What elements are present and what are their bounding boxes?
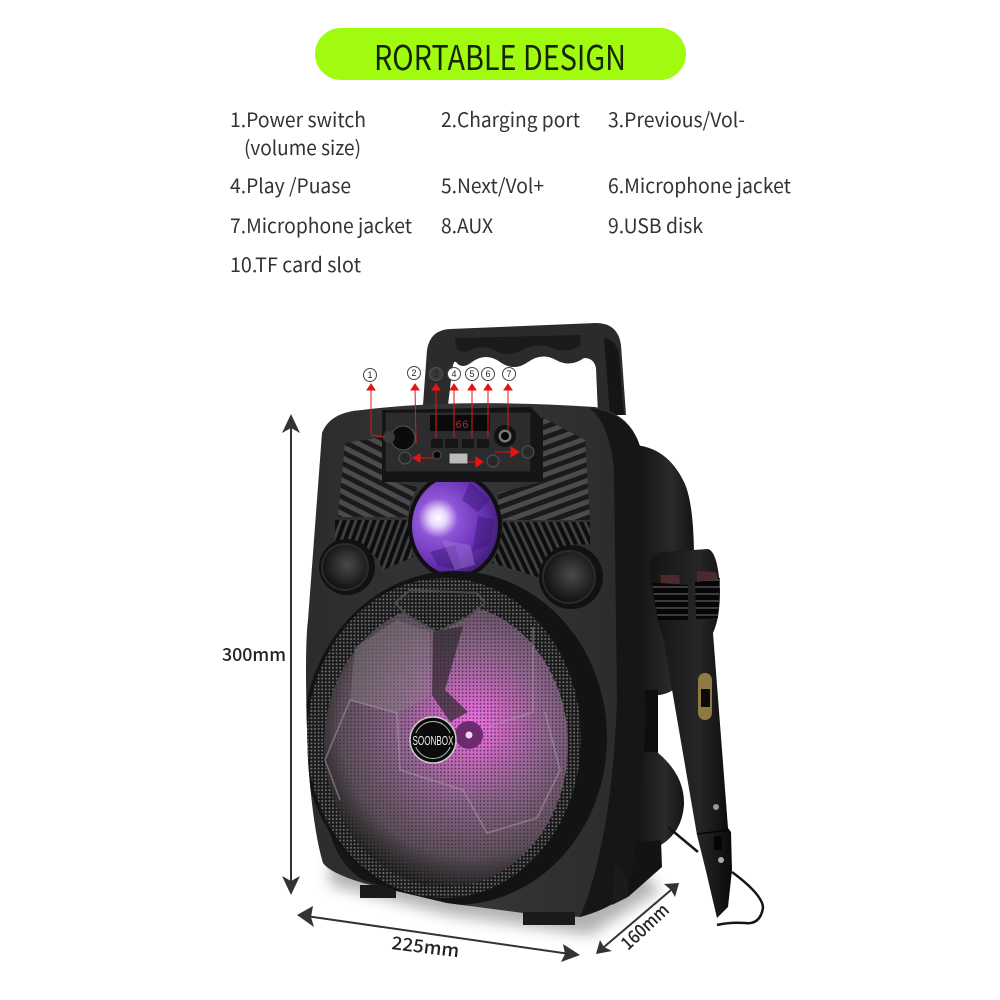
display: 66 bbox=[455, 420, 469, 432]
list of controls: 8.AUX bbox=[441, 210, 494, 239]
woofer bbox=[303, 571, 607, 905]
upper left vent bbox=[338, 437, 418, 517]
top hex panel bbox=[395, 590, 485, 632]
title pill: RORTABLE DESIGN bbox=[374, 31, 626, 80]
list of controls: 6.Microphone jacket bbox=[608, 170, 791, 199]
microphone bbox=[650, 549, 732, 918]
lower left vent bbox=[335, 520, 413, 570]
height dimension arrow bbox=[222, 414, 300, 895]
microphone cable bbox=[668, 827, 763, 925]
inner glow ball bbox=[455, 721, 483, 749]
mic head grilles bbox=[652, 578, 720, 620]
list of controls: 10.TF card slot bbox=[230, 249, 361, 278]
soonbox badge bbox=[410, 717, 456, 763]
callout numbers: 10 bbox=[524, 450, 532, 457]
callout numbers: 4 bbox=[451, 369, 457, 379]
callout numbers: 5 bbox=[469, 369, 475, 379]
width dimension arrow bbox=[297, 906, 580, 963]
width dimension arrow: 225mm bbox=[390, 929, 461, 963]
callout numbers: 6 bbox=[485, 369, 491, 379]
callout numbers: 7 bbox=[506, 369, 512, 379]
red callout arrows bbox=[367, 384, 519, 467]
callout numbers: 9 bbox=[490, 456, 496, 466]
left tweeter bbox=[319, 539, 375, 595]
control panel bbox=[382, 407, 543, 482]
list of controls: 1.Power switch bbox=[230, 104, 366, 133]
volume knob bbox=[383, 426, 415, 450]
upper right vent bbox=[498, 417, 590, 520]
display bbox=[430, 415, 490, 432]
football panel lines bbox=[325, 627, 560, 833]
list of controls: 5.Next/Vol+ bbox=[441, 170, 544, 199]
list of controls bbox=[230, 104, 791, 278]
callout numbers: 1 bbox=[367, 370, 373, 380]
list of controls: 9.USB disk bbox=[608, 210, 703, 239]
callout numbers: 2 bbox=[411, 368, 417, 378]
centre strut bbox=[432, 626, 468, 722]
lower right vent bbox=[492, 522, 590, 577]
callout numbers bbox=[364, 366, 534, 467]
mic switch bbox=[698, 673, 712, 720]
disco light ball bbox=[408, 473, 502, 579]
list of controls: (volume size) bbox=[244, 132, 361, 161]
callout numbers: 8 bbox=[402, 453, 408, 463]
speaker body bbox=[306, 403, 645, 925]
rear bumps bbox=[622, 445, 694, 897]
speaker handle bbox=[423, 323, 626, 415]
height dimension arrow: 300mm bbox=[222, 641, 286, 667]
soonbox badge: SOONBOX bbox=[412, 733, 454, 748]
usb port bbox=[449, 453, 468, 464]
right tweeter bbox=[539, 545, 603, 609]
depth dimension arrow: 160mm bbox=[614, 897, 675, 955]
aux jack bbox=[433, 451, 441, 459]
mic connector bbox=[697, 830, 729, 863]
list of controls: 4.Play /Puase bbox=[230, 170, 351, 199]
list of controls: 3.Previous/Vol- bbox=[608, 104, 745, 133]
callout numbers: 3 bbox=[433, 369, 439, 379]
control buttons bbox=[431, 439, 489, 448]
list of controls: 2.Charging port bbox=[441, 104, 580, 133]
left light panel bbox=[350, 620, 430, 713]
microphone jack bbox=[494, 425, 516, 447]
depth dimension arrow bbox=[596, 883, 679, 955]
list of controls: 7.Microphone jacket bbox=[230, 210, 412, 239]
floor shadow bbox=[330, 860, 660, 935]
